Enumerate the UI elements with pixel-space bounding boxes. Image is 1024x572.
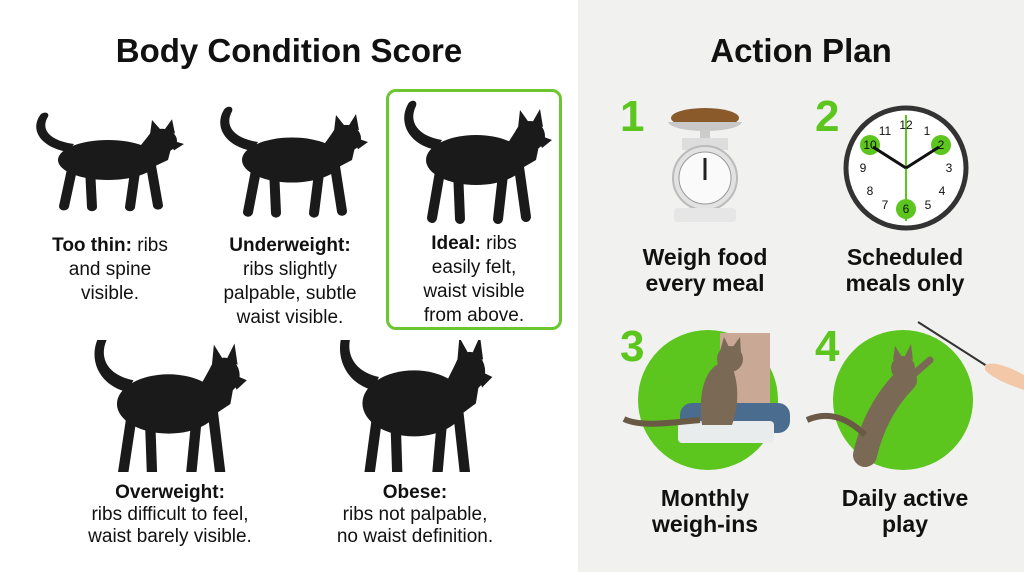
cat: obese [340,340,492,472]
icon: clock: 4 [939,184,946,198]
text: ideal: easily felt, [432,257,516,278]
highlight box: ideal [386,89,562,330]
text: too thin: and spine [69,259,151,280]
icon: clock: 11 [879,124,892,138]
text: overweight: ribs difficult to feel, [91,504,248,525]
text: daily active play: play [882,511,928,537]
panel: right background [578,0,1024,572]
number 3: 3 [620,322,644,371]
text: underweight [223,235,357,328]
icon: clock: 10 [863,138,877,152]
text: overweight: Overweight: [115,482,225,503]
number 4: 4 [815,322,839,371]
text: underweight: ribs slightly [243,259,337,280]
text: obese [337,482,493,547]
text: obese: ribs not palpable, [343,504,487,525]
text: too thin: Too thin: ribs [52,235,168,256]
text: too thin [52,235,168,304]
text: obese: no waist definition. [337,526,493,547]
text: monthly weigh-ins: Monthly [661,485,749,511]
text: scheduled [846,244,964,296]
icon: clock: 9 [860,161,867,175]
cat: overweight [94,340,247,472]
text: scheduled: meals only [846,270,964,296]
text: monthly weigh-ins: weigh-ins [652,511,758,537]
text: overweight: waist barely visible. [88,526,252,547]
icon: monthly weigh-in circle [622,330,790,470]
number 1: 1 [620,92,644,141]
icon: clock: 3 [946,161,953,175]
text: monthly weigh-ins [652,485,758,537]
text: weigh food: Weigh food [643,244,767,270]
cat: too thin [36,112,184,212]
text: obese: Obese: [383,482,447,503]
text: overweight [88,482,252,547]
cat: ideal [404,100,552,224]
icon: clock [844,106,968,230]
icon: clock: 12 [899,118,913,132]
icon: clock: 2 [938,138,945,152]
number 2: 2 [815,92,839,141]
icon: clock: 6 [903,202,910,216]
text: underweight: palpable, subtle [223,283,357,304]
icon: clock: 1 [924,124,931,138]
text: too thin: visible. [81,283,139,304]
text: weigh food: every meal [646,270,764,296]
text: underweight: Underweight: [229,235,351,256]
icon: clock: 8 [867,184,874,198]
text: daily active play [842,485,968,537]
cat: underweight [220,106,368,218]
text: weigh food [642,244,767,296]
text: daily active play: Daily active [842,485,968,511]
text: ideal: from above. [424,305,524,326]
text: ideal: waist visible [423,281,525,302]
icon: food scale [668,108,742,222]
icon: clock: 5 [925,198,932,212]
icon: daily play circle [806,321,1024,470]
text: scheduled: Scheduled [847,244,963,270]
icon: clock: 7 [882,198,889,212]
title: body condition score: Body Condition Score [116,32,462,69]
text: underweight: waist visible. [237,307,343,328]
title: action plan: Action Plan [710,32,892,69]
text: ideal [423,233,525,326]
text: ideal: Ideal: ribs [431,233,517,254]
